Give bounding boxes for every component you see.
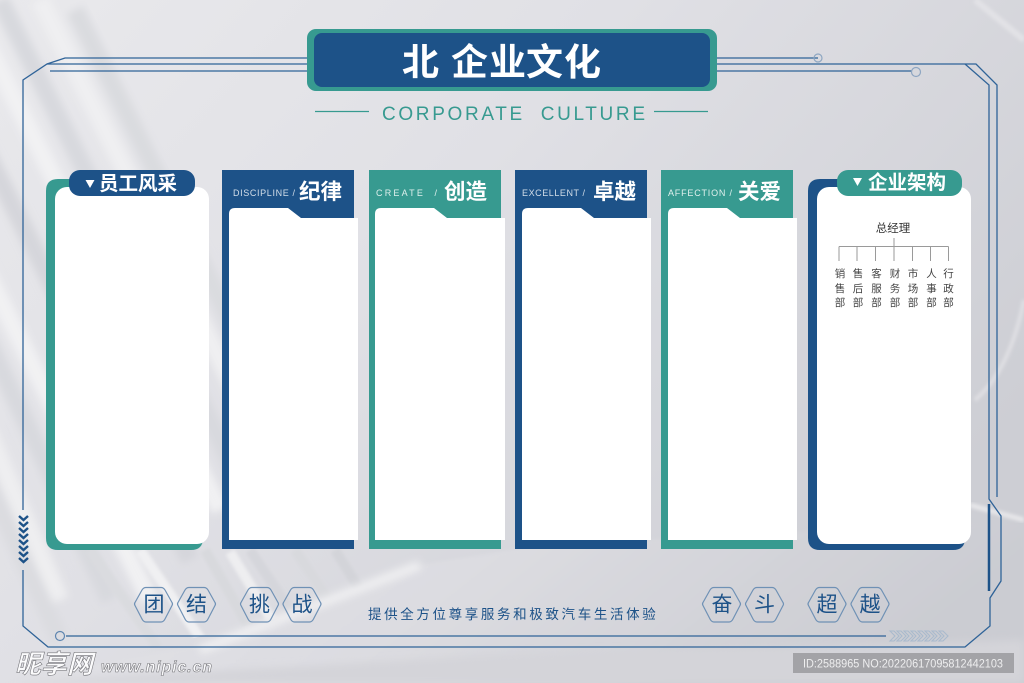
- panel heading: 员工风采: [99, 167, 178, 196]
- org chart departments: 部: [908, 296, 918, 309]
- hexagon labels: 斗: [754, 594, 775, 616]
- title banner: [307, 29, 717, 91]
- panel heading: 关爱: [738, 175, 781, 206]
- watermark: [15, 644, 212, 681]
- panel label: AFFECTION /: [668, 188, 732, 198]
- org chart departments: 市: [908, 267, 918, 280]
- org chart departments: 部: [926, 296, 937, 309]
- icon: bottom right chevrons: [890, 631, 948, 641]
- org chart departments: 行: [943, 267, 954, 280]
- hexagon labels: 战: [292, 594, 312, 616]
- org chart departments: 部: [890, 296, 900, 309]
- org chart departments: 部: [853, 296, 863, 309]
- image id stamp: [793, 653, 1014, 673]
- org chart departments: 财: [890, 267, 900, 280]
- title text: 北企业文化: [402, 32, 601, 86]
- panel heading: 企业架构: [868, 166, 946, 195]
- hexagon labels: 奋: [712, 594, 732, 616]
- panel: discipline: [222, 170, 358, 549]
- panel heading: 创造: [444, 175, 488, 206]
- org chart departments: 事: [926, 282, 937, 295]
- org chart departments: 部: [943, 296, 954, 309]
- panel: excellent: [515, 170, 651, 549]
- org chart departments: 人: [926, 268, 937, 280]
- org chart departments: 售: [853, 267, 863, 280]
- image id stamp: ID:2588965 NO:20220617095812442103: [803, 658, 1003, 670]
- panel label: DISCIPLINE /: [233, 188, 295, 198]
- panel heading: 卓越: [593, 175, 637, 206]
- org chart departments: 部: [871, 296, 882, 309]
- panel: affection: [661, 170, 797, 549]
- org chart departments: 服: [871, 283, 882, 295]
- hexagon labels: 团: [144, 594, 164, 616]
- org chart departments: 政: [943, 282, 954, 295]
- icon: triangle: [853, 178, 862, 186]
- org chart departments: 场: [908, 282, 918, 295]
- org chart departments: 售: [835, 282, 845, 295]
- org chart departments: 务: [890, 282, 901, 295]
- panel: create: [369, 170, 505, 549]
- hexagon labels: [144, 594, 880, 616]
- hexagon labels: 越: [860, 594, 880, 616]
- watermark: www.nipic.cn: [101, 659, 212, 676]
- hexagon labels: 挑: [249, 594, 270, 616]
- icon: left chevrons: [19, 516, 28, 562]
- org chart departments: 客: [871, 267, 882, 280]
- org chart departments: 销: [835, 267, 845, 280]
- panel: organization: [808, 166, 971, 550]
- org chart departments: 后: [853, 283, 863, 295]
- org chart root: 总经理: [876, 221, 911, 235]
- icon: triangle: [86, 180, 94, 188]
- watermark: 昵享网: [15, 644, 97, 681]
- panel label: EXCELLENT /: [522, 188, 585, 198]
- org chart departments: [835, 267, 954, 309]
- hexagon badges: [134, 588, 889, 622]
- hexagon labels: 超: [816, 594, 838, 616]
- org chart departments: 部: [835, 296, 845, 309]
- hexagon labels: 结: [186, 594, 207, 616]
- org chart connectors: [839, 238, 948, 261]
- slogan: 提供全方位尊享服务和极致汽车生活体验: [368, 606, 658, 622]
- subtitle: corporate culture: CORPORATE CULTURE: [382, 104, 645, 125]
- panel heading: 纪律: [299, 175, 342, 206]
- panel: employee style: [46, 167, 209, 550]
- org chart: [835, 221, 954, 309]
- panel label: CREATE /: [376, 188, 437, 198]
